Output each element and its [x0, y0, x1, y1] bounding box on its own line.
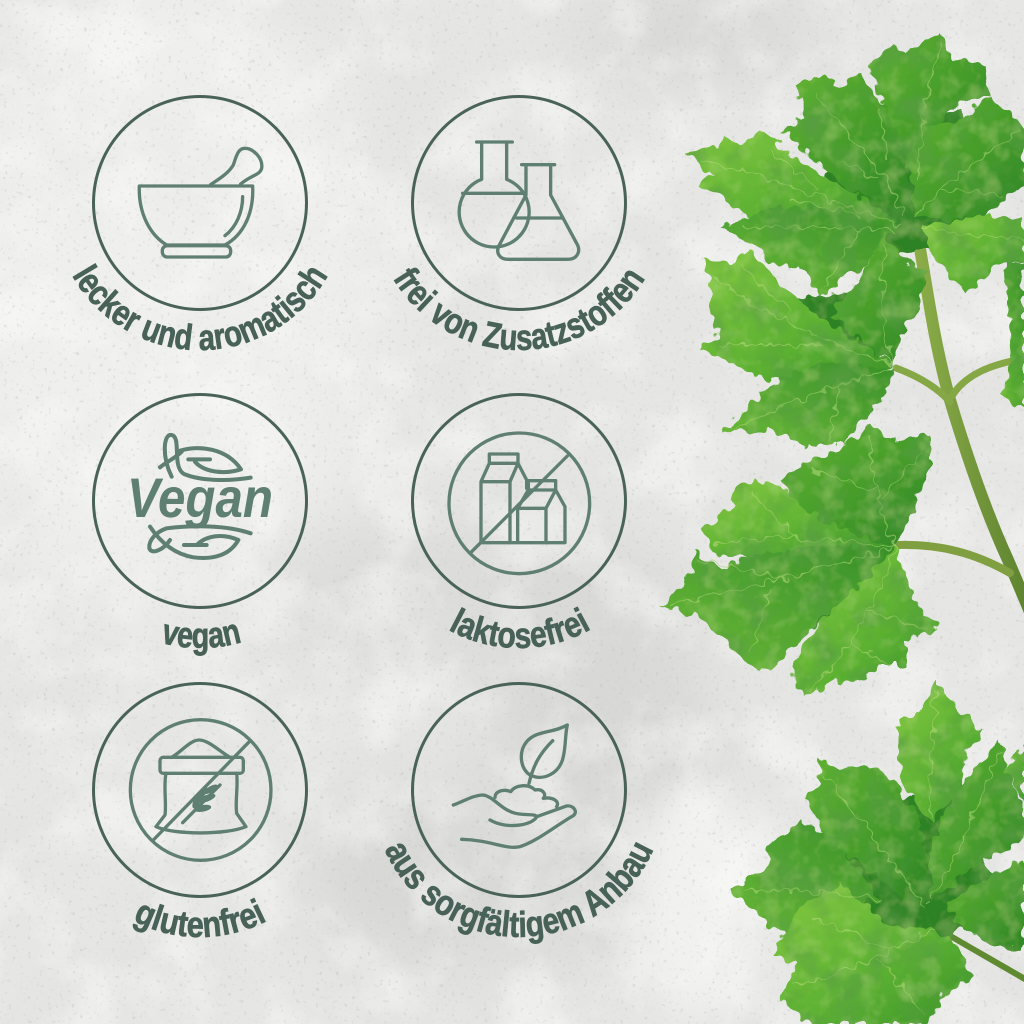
leaf clusters [660, 33, 1024, 1024]
label: frei von Zusatzstoffen [394, 268, 645, 350]
label: aus sorgfältigem Anbau [386, 842, 654, 944]
label: laktosefrei [450, 606, 590, 649]
icon: hand holding seedling [453, 725, 575, 847]
icon: crossed out flour sack [130, 720, 271, 860]
cluster centre shading [740, 110, 1000, 960]
panel: frei von Zusatzstoffen [394, 95, 645, 350]
ring [412, 394, 626, 608]
icon: laboratory flasks [459, 142, 579, 259]
panel: lecker und aromatisch [72, 95, 328, 351]
icon: crossed out milk cartons [449, 433, 590, 574]
icon: vegan logo [127, 435, 273, 558]
ring [94, 96, 306, 310]
panel: laktosefrei [411, 393, 627, 649]
label: glutenfrei [132, 898, 266, 938]
stems [890, 190, 1024, 982]
plant: celery leaves [660, 33, 1024, 1024]
ring [412, 684, 626, 896]
logo word: Vegan [127, 466, 273, 529]
label: lecker und aromatisch [72, 263, 328, 351]
ring [94, 394, 306, 608]
icon: mortar and pestle [139, 148, 262, 257]
panel: vegan [92, 393, 308, 656]
leaf veins [670, 45, 1024, 1015]
panel: glutenfrei [92, 682, 308, 938]
logo swashes [149, 435, 251, 558]
label: vegan [164, 624, 241, 656]
ring [412, 96, 626, 310]
panel: aus sorgfältigem Anbau [386, 682, 654, 944]
ring [94, 684, 306, 896]
